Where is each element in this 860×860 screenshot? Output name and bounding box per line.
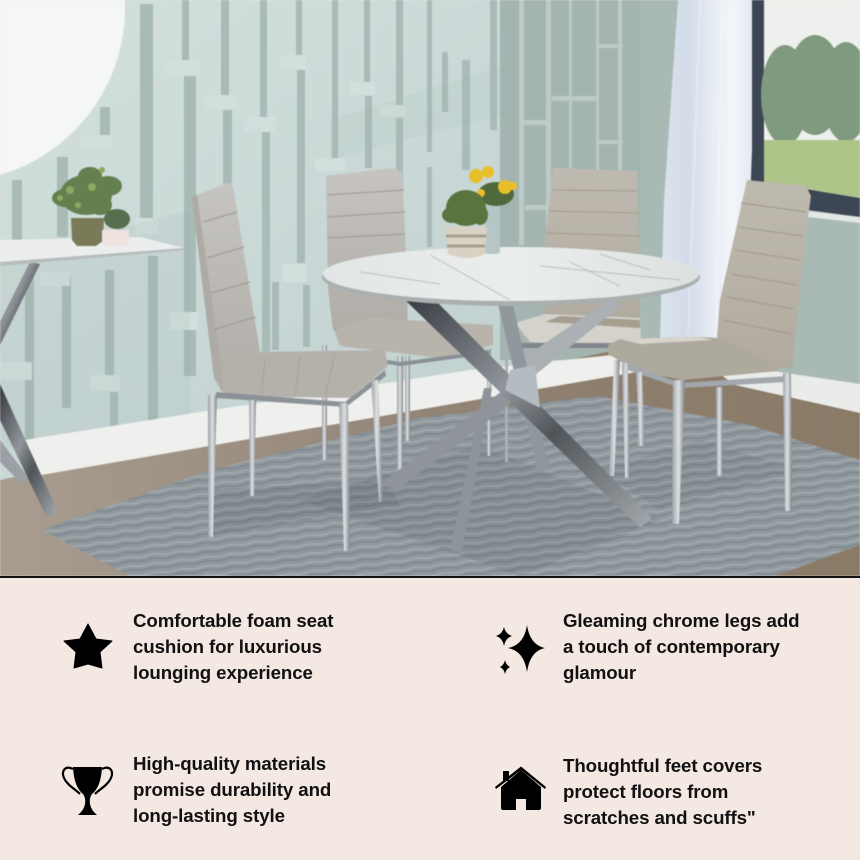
photo: dining room scene	[0, 0, 860, 576]
text: materials: long-lasting style	[133, 805, 285, 826]
wall	[0, 0, 660, 480]
chair: front left	[192, 183, 388, 551]
divider	[0, 576, 860, 578]
chair: back right	[505, 168, 642, 462]
text: feet covers: Thoughtful feet covers	[563, 755, 762, 776]
text: materials	[133, 753, 331, 826]
icon: trophy	[62, 766, 114, 815]
mirror	[0, 0, 125, 182]
text: foam seat: cushion for luxurious	[133, 636, 322, 657]
table top with vase	[322, 247, 700, 306]
back panelled wall	[500, 0, 760, 360]
icon: sparkles	[496, 625, 545, 674]
console table	[0, 237, 184, 516]
panel: features	[0, 578, 860, 860]
icon: house	[495, 766, 546, 810]
text: feet covers: protect floors from	[563, 781, 728, 802]
icon: star	[64, 624, 112, 668]
text: chrome legs: glamour	[563, 662, 636, 683]
plants on console	[52, 167, 130, 246]
text: foam seat: lounging experience	[133, 662, 313, 683]
curtain	[660, 0, 752, 338]
window with view	[750, 0, 860, 223]
flower vase and potted plant	[442, 166, 517, 258]
text: materials: promise durability and	[133, 779, 331, 800]
text: feet covers: scratches and scuffs"	[563, 807, 756, 828]
text: chrome legs: Gleaming chrome legs add	[563, 610, 799, 631]
chair: back left	[322, 168, 493, 486]
text: feet covers	[563, 755, 762, 828]
baseboards	[24, 350, 860, 478]
right wall	[700, 205, 860, 400]
chair: front right	[608, 180, 811, 524]
text: chrome legs	[563, 610, 799, 683]
text: materials: High-quality materials	[133, 753, 326, 774]
text: foam seat: Comfortable foam seat	[133, 610, 333, 631]
text: chrome legs: a touch of contemporary	[563, 636, 780, 657]
table base	[378, 295, 652, 552]
rug	[42, 396, 860, 576]
floor	[0, 345, 860, 576]
text: foam seat	[133, 610, 334, 683]
